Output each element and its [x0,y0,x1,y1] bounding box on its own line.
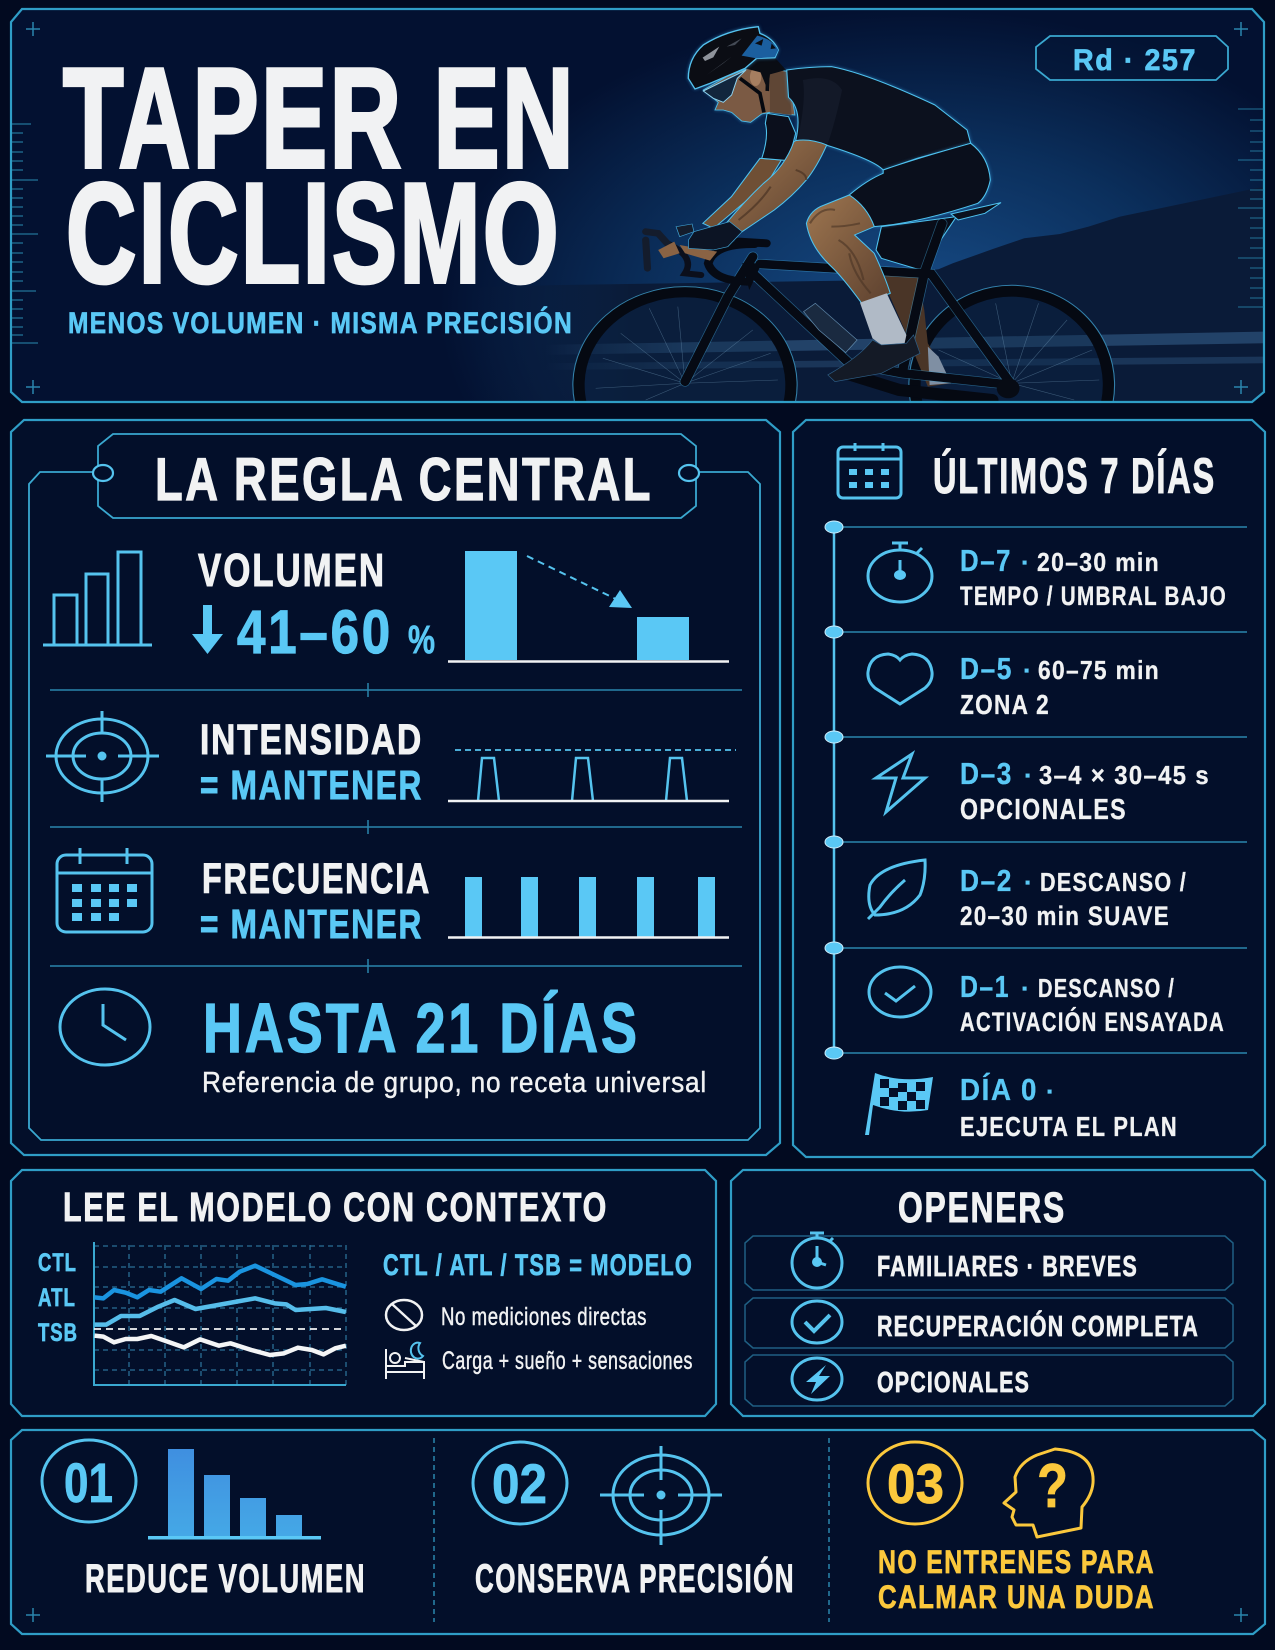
row: dia 0: EJECUTA EL PLAN [960,1111,1178,1142]
volumen reduction value: 41–60 [237,598,393,666]
timeline [825,521,1247,1059]
sock [860,293,906,345]
hands and glove [658,222,742,261]
row: dia 0 [865,1072,1178,1142]
row: familiares breves [745,1233,1233,1290]
far leg [876,217,956,387]
shorts [849,143,990,227]
illustration: cyclist on road bike at night [381,27,1264,485]
volumen reduction value: % [408,618,435,662]
chart: frequency bars [448,877,729,938]
takeaway 01 [42,1440,366,1601]
corner marks and scale ticks [12,22,1264,394]
row: D-2: · [1024,867,1034,897]
icon: calendar [57,848,152,932]
hasta 21 dias: HASTA 21 DÍAS [203,989,640,1067]
chart labels [38,1249,78,1347]
jersey sleeve far [762,113,796,161]
row: D-3: OPCIONALES [960,794,1127,826]
row: D-1: D–1 [960,969,1010,1004]
row: D-3 [876,754,1210,826]
volumen label: VOLUMEN [198,544,386,596]
row: D-3: · [1024,760,1034,790]
near leg [806,195,890,303]
no mediciones directas: No mediciones directas [441,1303,647,1331]
reference note: Referencia de grupo, no receta universal [202,1067,707,1099]
frecuencia label [200,855,431,947]
jersey torso [787,67,971,170]
takeaway 02: 02 [492,1452,547,1515]
carga sueno sensaciones: Carga + sueño + sensaciones [442,1347,693,1375]
heading: OPENERS [898,1184,1066,1232]
row: familiares breves: FAMILIARES · BREVES [877,1251,1138,1283]
row: dia 0: DÍA 0 [960,1072,1038,1107]
intensidad label [200,716,423,808]
panel: takeaways [11,1430,1265,1634]
frecuencia label: FRECUENCIA [202,855,431,903]
row: D-2 [868,860,1187,931]
row: D-7: · [1021,547,1031,577]
icon: prohibited [386,1300,422,1330]
shoe [828,335,920,382]
wheels [573,285,1115,485]
takeaway 01: REDUCE VOLUMEN [85,1557,366,1601]
badge: Rd 257: Rd · 257 [1073,44,1197,77]
frecuencia label: = MANTENER [200,901,423,947]
takeaway 03: CALMAR UNA DUDA [878,1579,1155,1615]
chart: intensity spikes [448,750,736,801]
takeaway 03: NO ENTRENES PARA [878,1544,1155,1580]
icon: head with question mark: ? [1037,1452,1068,1521]
takeaway 02: CONSERVA PRECISIÓN [475,1555,795,1601]
heading plaque [93,434,699,518]
model note: CTL / ATL / TSB = MODELO [383,1249,693,1282]
icon: calendar [838,443,901,498]
row: D-5: D–5 [960,651,1013,686]
near arm [726,140,827,232]
icon: rising bars [43,552,152,645]
row: opcionales [745,1355,1233,1406]
row: D-1: DESCANSO / [1038,973,1175,1003]
panel: lee el modelo con contexto [11,1170,716,1416]
row: D-5 [868,651,1160,720]
takeaway 03: 03 [887,1452,944,1515]
panel: openers [731,1170,1265,1416]
row: D-1 [869,967,1225,1037]
row: dia 0: · [1046,1076,1056,1106]
row: D-7: 20–30 min [1037,547,1160,577]
heading: LEE EL MODELO CON CONTEXTO [63,1184,608,1230]
icon: bed with moon [386,1343,424,1379]
takeaway 03 [868,1442,1155,1615]
head [688,27,795,122]
title: CICLISMO [66,154,561,313]
panel: ultimos 7 dias [793,420,1265,1157]
intensidad label: = MANTENER [200,762,423,808]
chart labels: CTL [38,1249,77,1277]
row: D-2: 20–30 min SUAVE [960,901,1170,931]
row: D-5: 60–75 min [1038,655,1160,685]
chart: volume reduction bars [448,551,729,662]
icon: head with question mark [1004,1449,1093,1537]
row: D-7 [868,543,1227,611]
title: TAPER EN [63,39,576,198]
far arm [703,158,781,228]
takeaway 01: 01 [64,1451,113,1514]
panel: la regla central [11,420,780,1155]
badge: Rd 257 [1036,36,1228,80]
icon: target [600,1446,722,1545]
icon: clock [60,989,150,1065]
panel: hero header [10,8,1266,404]
row: D-5: · [1023,655,1033,685]
title [63,39,576,313]
line chart: CTL ATL TSB [94,1242,346,1385]
bike frame [646,203,1020,400]
row: D-5: ZONA 2 [960,689,1050,720]
row: D-2: DESCANSO / [1040,867,1187,897]
row: D-2: D–2 [960,863,1013,898]
chart labels: TSB [38,1319,78,1347]
row: recuperacion completa [745,1298,1233,1348]
row: D-3: D–3 [960,756,1013,791]
frame outline [11,9,1264,402]
chart labels: ATL [38,1284,76,1312]
subtitle: MENOS VOLUMEN · MISMA PRECISIÓN [68,306,573,340]
row: opcionales: OPCIONALES [877,1367,1030,1399]
helmet [688,27,778,89]
intensidad label: INTENSIDAD [200,716,423,764]
icon: descending bars [148,1449,321,1540]
takeaway 02 [473,1442,795,1601]
row: D-7: D–7 [960,543,1012,578]
heading plaque: LA REGLA CENTRAL [155,446,653,513]
row: D-3: 3–4 × 30–45 s [1039,760,1210,790]
row: D-1: · [1021,973,1031,1003]
icon: target [46,711,159,802]
